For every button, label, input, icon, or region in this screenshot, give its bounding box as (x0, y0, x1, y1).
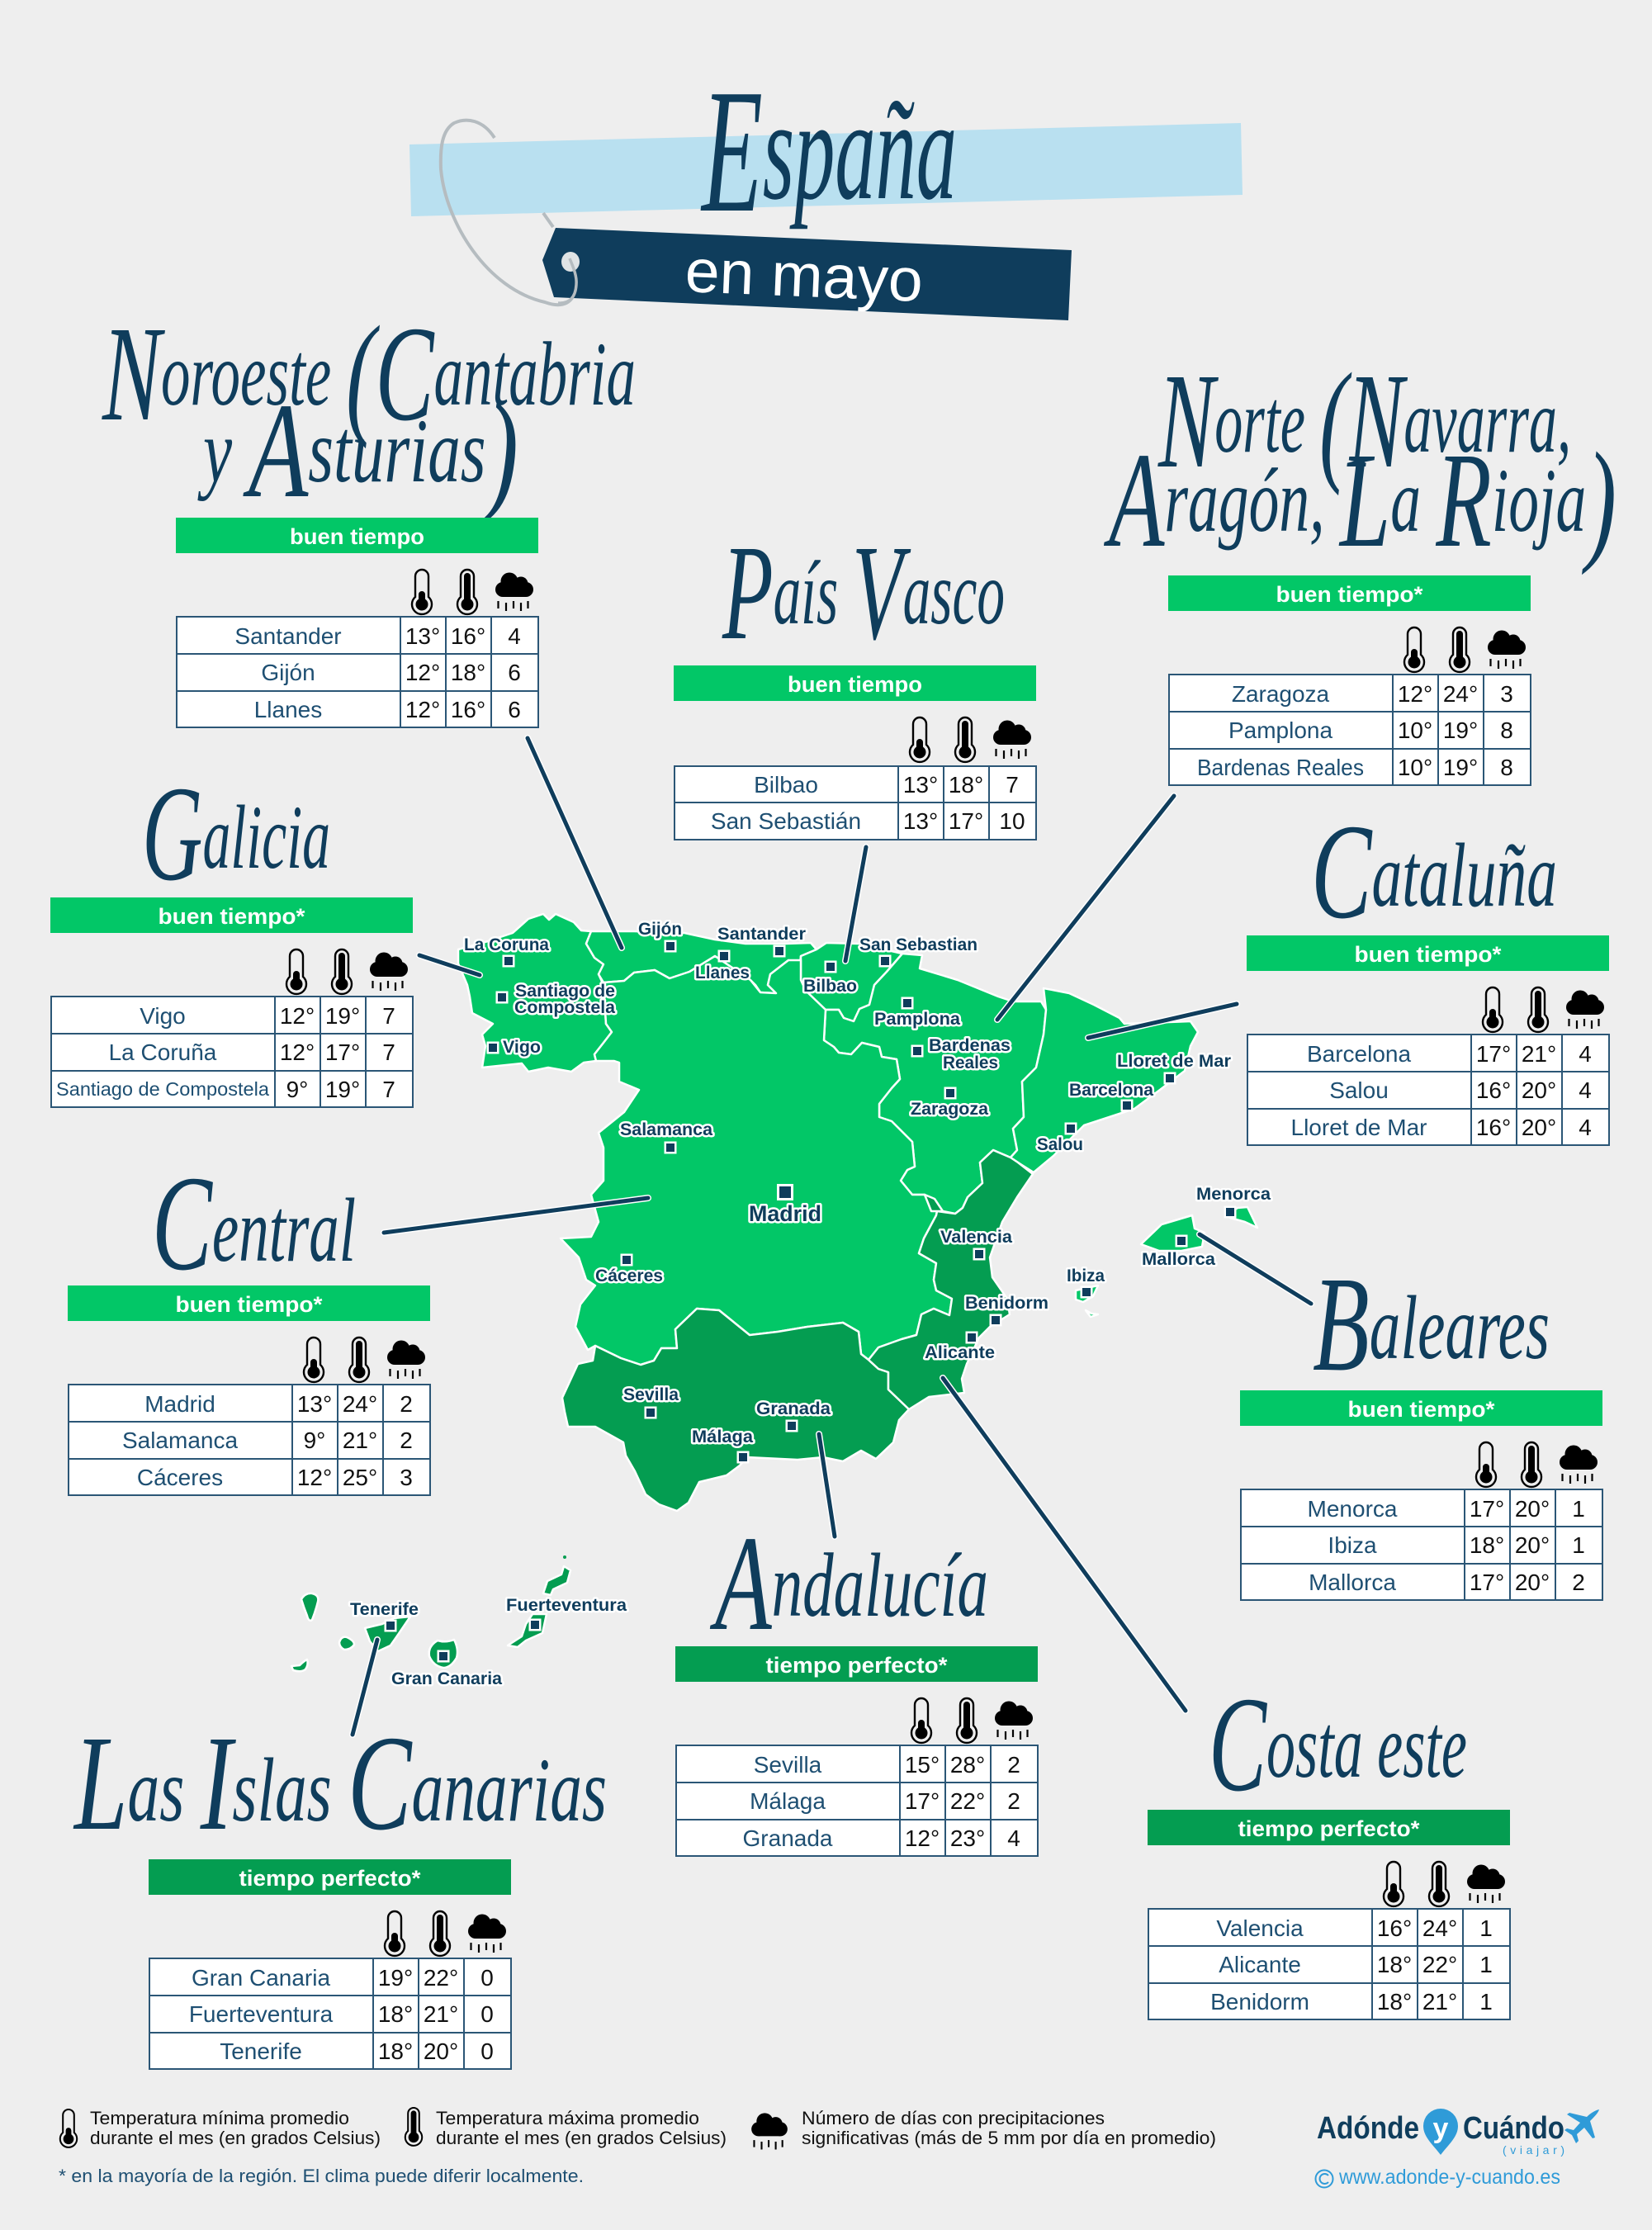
climate card: Costa este: Benidorm (1210, 1989, 1309, 2015)
climate card: Andalucía: 23° (950, 1825, 985, 1851)
climate card: País Vasco: Bilbao (754, 772, 818, 798)
climate card: Cataluña: 4 (1579, 1077, 1592, 1103)
climate card: Andalucía: 17° (905, 1788, 940, 1814)
climate card: Central: 3 (400, 1465, 413, 1490)
climate card: Central: Cáceres (137, 1465, 223, 1490)
header: title and tag (409, 52, 1243, 320)
climate card: Central: Salamanca (122, 1427, 238, 1453)
heading: Norte: ioja (1492, 450, 1586, 551)
city labels: Compostela (514, 998, 615, 1017)
city labels: Zaragoza (911, 1100, 988, 1119)
heading: Norte: ragón, (1164, 450, 1340, 551)
city labels: Bilbao (803, 977, 857, 996)
climate card: Canarias: Gran Canaria (192, 1965, 330, 1991)
climate card: Andalucía: Málaga (750, 1788, 826, 1814)
panel: Norte (1103, 345, 1616, 785)
heading: Norte: R (1436, 424, 1492, 575)
climate card: Andalucía: Granada (743, 1825, 833, 1851)
region: Andalucía (562, 1309, 909, 1511)
climate card: Noroeste: 6 (508, 660, 521, 685)
climate card: Andalucía: 15° (905, 1752, 940, 1778)
city labels: Granada (756, 1399, 831, 1418)
island: La Graciosa (563, 1555, 566, 1559)
climate card: Canarias: Fuerteventura (189, 2001, 334, 2027)
climate card: Galicia: La Coruña (109, 1039, 217, 1065)
subtitle: en mayo: en mayo (684, 236, 925, 315)
climate card: Cataluña: buen tiempo* (1354, 942, 1502, 967)
climate card: Noroeste: Santander (234, 623, 342, 649)
city labels: Reales (943, 1053, 998, 1072)
leader: Costa este (943, 1378, 1186, 1711)
heading: Las Islas Canarias: C (348, 1707, 413, 1858)
city labels: Fuerteventura (506, 1596, 627, 1615)
climate card: Andalucía: Sevilla (754, 1752, 822, 1778)
city labels (350, 920, 1271, 1688)
island: Gran Canaria (429, 1640, 457, 1668)
city labels: Benidorm (965, 1294, 1048, 1313)
climate card: Cataluña: 20° (1522, 1077, 1556, 1103)
heading: Noroeste: sturias (308, 400, 486, 501)
climate card: País Vasco: 18° (949, 772, 983, 798)
climate card: Galicia: 7 (382, 1077, 395, 1102)
region: Noroeste (586, 931, 817, 993)
climate card: Canarias: Tenerife (220, 2038, 302, 2064)
climate card: Central: 2 (400, 1391, 413, 1417)
climate card: Costa este: 18° (1377, 1989, 1412, 2015)
leader: Galicia (419, 955, 480, 975)
region: enclave (925, 1195, 943, 1211)
climate card: Canarias: 20° (424, 2038, 458, 2064)
heading: Andalucía: A (709, 1508, 773, 1659)
climate card: Noroeste: 6 (508, 697, 521, 722)
climate card: Costa este: Valencia (1216, 1915, 1304, 1941)
leader: Central (384, 1198, 648, 1233)
climate card: País Vasco: 10 (999, 808, 1025, 834)
heading: Norte: A (1103, 424, 1165, 575)
climate card: Cataluña: 16° (1476, 1077, 1511, 1103)
climate card: País Vasco: 17° (949, 808, 983, 834)
climate card: Central: 21° (343, 1427, 377, 1453)
legend text: minimum temperature: Temperatura mínima promedio (90, 2108, 349, 2128)
tag string front (558, 258, 576, 303)
city labels: Barcelona (1069, 1081, 1153, 1100)
climate card: Norte (1168, 575, 1531, 785)
climate card: Canarias: 0 (480, 2001, 494, 2027)
heading: Central: entral (212, 1180, 356, 1281)
climate card: País Vasco: 7 (1006, 772, 1019, 798)
region: Galicia (458, 914, 612, 1072)
city labels: San Sebastian (859, 935, 977, 954)
climate card: Norte: Zaragoza (1232, 681, 1330, 707)
climate card: Galicia: Vigo (140, 1003, 186, 1029)
heading: Baleares: aleares (1370, 1277, 1550, 1378)
climate card: Noroeste: 16° (451, 623, 485, 649)
climate card: Noroeste (176, 518, 538, 727)
climate card: Andalucía: 2 (1007, 1752, 1020, 1778)
island: Menorca (1230, 1207, 1257, 1228)
climate card: Central: 24° (343, 1391, 377, 1417)
climate card: Norte: 19° (1443, 755, 1478, 780)
climate card: Costa este (1148, 1810, 1510, 2019)
legend text: rain days: Número de días con precipitaciones (802, 2108, 1105, 2128)
city labels: Pamplona (874, 1010, 960, 1029)
legend text: rain days (802, 2108, 1216, 2148)
climate card: Noroeste: 4 (508, 623, 521, 649)
heading: Cataluña: C (1311, 796, 1373, 947)
climate card: Cataluña: 4 (1579, 1115, 1592, 1140)
island: Formentera (1086, 1310, 1098, 1317)
climate card: Central (68, 1285, 430, 1495)
climate card: Andalucía: 28° (950, 1752, 985, 1778)
climate card: Baleares: Menorca (1308, 1496, 1398, 1522)
heading: País Vasco: asco (903, 542, 1005, 643)
legend text: rain days: significativas (más de 5 mm por día en promedio) (802, 2128, 1216, 2148)
city labels: Bardenas (929, 1036, 1011, 1055)
climate card: Galicia: buen tiempo* (159, 904, 305, 929)
logo sub: viajar: ( v i a j a r ) (1503, 2143, 1564, 2157)
legend icon: rain cloud (751, 2113, 788, 2150)
website: www.adonde-y-cuando.es (1338, 2166, 1560, 2189)
heading: Norte: ) (1582, 424, 1616, 575)
city labels: Mallorca (1142, 1250, 1215, 1269)
climate card: Central: 25° (343, 1465, 377, 1490)
climate card: Noroeste: 12° (405, 697, 440, 722)
island: La Gomera (339, 1637, 354, 1650)
icon: copyright (1316, 2170, 1332, 2188)
heading: Las Islas Canarias: I (200, 1707, 236, 1858)
heading: Costa este: C (1209, 1669, 1267, 1820)
climate card: Canarias: tiempo perfecto* (239, 1866, 421, 1891)
light blue band (409, 123, 1243, 216)
climate card: Baleares: 18° (1470, 1532, 1504, 1558)
climate card: Baleares: 2 (1572, 1570, 1585, 1595)
legend text: minimum temperature (90, 2108, 381, 2148)
climate card: Canarias: 22° (424, 1965, 458, 1991)
city labels: Salamanca (620, 1120, 712, 1139)
heading: Noroeste: oroeste (161, 324, 346, 424)
climate card: Central: 12° (297, 1465, 332, 1490)
island: Ibiza (1076, 1285, 1098, 1302)
climate card: Noroeste: 13° (405, 623, 440, 649)
climate card: Galicia: 9° (286, 1077, 308, 1102)
climate card: Andalucía (675, 1646, 1038, 1856)
region: Costa este (869, 1150, 1033, 1409)
climate card: Norte: buen tiempo* (1276, 582, 1423, 607)
heading: Andalucía: ndalucía (772, 1535, 988, 1636)
climate card: Norte: 19° (1443, 717, 1478, 743)
heading: Norte: (N (1319, 345, 1408, 496)
island: Tenerife (365, 1617, 410, 1651)
climate card: Cataluña: Lloret de Mar (1291, 1115, 1427, 1140)
heading: Costa este: osta este (1266, 1696, 1467, 1797)
climate card: Costa este: 16° (1377, 1915, 1412, 1941)
climate card: Costa este: tiempo perfecto* (1238, 1816, 1420, 1841)
climate card: Andalucía: 12° (905, 1825, 940, 1851)
climate card: Cataluña: 17° (1476, 1041, 1511, 1067)
climate card: Andalucía: 22° (950, 1788, 985, 1814)
heading: Noroeste: N (102, 298, 165, 449)
city labels: Tenerife (350, 1600, 419, 1619)
climate card: Galicia: 12° (280, 1039, 315, 1065)
heading: Norte (1103, 345, 1616, 575)
legend (59, 2108, 1216, 2186)
climate card: Andalucía: 4 (1007, 1825, 1020, 1851)
heading: Baleares: B (1313, 1248, 1370, 1399)
island: Fuerteventura (508, 1614, 547, 1647)
heading: Las Islas Canarias: L (73, 1707, 128, 1858)
leader: Cataluña (1088, 1004, 1237, 1038)
climate card: Galicia: 7 (382, 1039, 395, 1065)
islands: Baleares (1076, 1207, 1257, 1317)
climate card: Galicia: 17° (325, 1039, 360, 1065)
heading: Noroeste: (C (346, 298, 435, 449)
panel: Las Islas Canarias (73, 1707, 607, 2069)
climate card: País Vasco: 13° (903, 772, 938, 798)
climate card: País Vasco (674, 665, 1036, 840)
heading: Las Islas Canarias: as (128, 1740, 201, 1840)
climate card: Cataluña: 16° (1476, 1115, 1511, 1140)
heading: Noroeste (102, 298, 636, 526)
city labels: Alicante (925, 1343, 995, 1362)
climate card: Norte: Pamplona (1228, 717, 1332, 743)
city labels: Gran Canaria (391, 1669, 502, 1688)
city labels: Valencia (940, 1228, 1012, 1247)
logo letter: y: y (1433, 2113, 1449, 2144)
climate card: Norte: Bardenas Reales (1197, 755, 1364, 780)
climate card: Central: 13° (297, 1391, 332, 1417)
city labels: Santiago de (515, 982, 615, 1001)
city labels: Gijón (638, 920, 682, 939)
islands: Canarias (291, 1555, 570, 1671)
climate card: Baleares: buen tiempo* (1347, 1397, 1495, 1422)
climate card: Canarias: 18° (378, 2038, 413, 2064)
region: Cataluña (1011, 988, 1198, 1172)
city labels: Ibiza (1067, 1267, 1105, 1285)
climate card: Noroeste: buen tiempo (290, 524, 424, 549)
climate card: Baleares: 17° (1470, 1496, 1504, 1522)
map of Spain (291, 738, 1311, 1735)
climate card: País Vasco: buen tiempo (788, 672, 922, 697)
heading: País Vasco: aís (774, 542, 852, 643)
climate card: Noroeste: 18° (451, 660, 485, 685)
panel: Central (68, 1148, 430, 1495)
climate card: Canarias: 21° (424, 2001, 458, 2027)
climate card: Cataluña (1247, 935, 1609, 1145)
legend text: maximum temperature (436, 2108, 727, 2148)
heading: País Vasco: P (722, 517, 774, 668)
climate card: Baleares: 1 (1572, 1532, 1585, 1558)
region: Norte (824, 954, 1046, 1214)
climate card: Costa este: Alicante (1219, 1952, 1301, 1977)
leader: Baleares (1200, 1234, 1311, 1304)
leader: Canarias (353, 1640, 377, 1735)
climate card: Norte: 3 (1500, 681, 1513, 707)
leader: Norte (997, 796, 1174, 1020)
climate card: Costa este: 21° (1422, 1989, 1457, 2015)
heading: Las Islas Canarias: anarias (412, 1740, 607, 1840)
legend text: maximum temperature: Temperatura máxima promedio (436, 2108, 699, 2128)
climate card: Noroeste: Llanes (254, 697, 322, 722)
climate card: Galicia: 12° (280, 1003, 315, 1029)
heading: Noroeste: antabria (434, 324, 636, 424)
footnote: * en la mayoría de la región. El clima puede diferir localmente. (59, 2166, 584, 2186)
heading: Noroeste: A (243, 375, 309, 526)
climate card: Costa este: 1 (1479, 1952, 1493, 1977)
climate card: Canarias: 18° (378, 2001, 413, 2027)
panel: Noroeste (102, 298, 636, 727)
climate card: Baleares: Ibiza (1328, 1532, 1377, 1558)
heading: Central: C (152, 1148, 213, 1299)
panel: Galicia (50, 758, 413, 1107)
city labels: Llanes (695, 963, 750, 982)
panel: País Vasco (674, 517, 1036, 840)
climate card: Galicia (50, 897, 413, 1107)
island: La Palma (301, 1593, 318, 1621)
city labels: Sevilla (623, 1385, 679, 1404)
climate card: Galicia: Santiago de Compostela (56, 1078, 269, 1100)
tag string (441, 121, 576, 305)
heading: Noroeste: ) (481, 375, 518, 526)
heading: Norte: orte (1214, 371, 1319, 471)
heading: Galicia: alicia (202, 787, 330, 888)
climate card: Cataluña: 20° (1522, 1115, 1556, 1140)
climate card: Costa este: 1 (1479, 1915, 1493, 1941)
icon: location pin (1423, 2109, 1458, 2155)
heading: Cataluña: ataluña (1372, 825, 1557, 926)
climate card: Andalucía: 2 (1007, 1788, 1020, 1814)
panel: Baleares (1240, 1248, 1602, 1600)
climate card: Cataluña: Barcelona (1307, 1041, 1411, 1067)
heading: Norte: N (1157, 345, 1219, 496)
climate card: Galicia: 19° (325, 1003, 360, 1029)
city labels: Lloret de Mar (1117, 1052, 1231, 1071)
island: Lanzarote (543, 1566, 570, 1595)
climate card: Noroeste: 12° (405, 660, 440, 685)
icon: plane (1564, 2109, 1599, 2143)
heading: País Vasco: V (852, 517, 911, 668)
climate card: Norte: 12° (1398, 681, 1432, 707)
climate card: Baleares: 20° (1515, 1496, 1550, 1522)
city labels: Salou (1037, 1135, 1083, 1154)
climate card: País Vasco: San Sebastián (711, 808, 861, 834)
title: España: E (700, 52, 763, 249)
climate card: Costa este: 1 (1479, 1989, 1493, 2015)
climate card: Canarias: 0 (480, 1965, 494, 1991)
city labels: Santander (717, 925, 806, 944)
climate card: Noroeste: 16° (451, 697, 485, 722)
climate card: Norte: 24° (1443, 681, 1478, 707)
climate card: Baleares: 17° (1470, 1570, 1504, 1595)
city labels: Madrid (749, 1201, 821, 1226)
climate card: País Vasco: 13° (903, 808, 938, 834)
tag hole (561, 252, 580, 272)
climate card: Cataluña: Salou (1329, 1077, 1389, 1103)
city markers (385, 940, 1237, 1663)
logo word: Cuándo: Cuándo (1463, 2111, 1564, 2146)
heading: Norte: a (1390, 450, 1436, 551)
legend text: minimum temperature: durante el mes (en grados Celsius) (90, 2128, 381, 2148)
heading: Las Islas Canarias: slas (232, 1740, 348, 1840)
city labels: La Coruna (464, 935, 549, 954)
climate card: Cataluña: 21° (1522, 1041, 1556, 1067)
legend icon: minimum temperature (60, 2109, 77, 2147)
city labels: Cáceres (595, 1267, 663, 1285)
city labels: Menorca (1196, 1185, 1271, 1204)
panel: Costa este (1148, 1669, 1510, 2019)
climate card: Norte: 8 (1500, 755, 1513, 780)
climate card: Norte: 10° (1398, 717, 1432, 743)
region: País Vasco (801, 943, 902, 1021)
climate card: Central: 2 (400, 1427, 413, 1453)
region: Central (561, 956, 952, 1365)
panel: Andalucía (675, 1508, 1038, 1856)
panel: Cataluña (1247, 796, 1609, 1145)
climate card: Central: buen tiempo* (175, 1292, 323, 1317)
city labels: Málaga (692, 1427, 753, 1446)
island: Mallorca (1141, 1215, 1205, 1251)
climate card: Galicia: 7 (382, 1003, 395, 1029)
climate card: Central: 9° (304, 1427, 325, 1453)
climate card: Norte: 8 (1500, 717, 1513, 743)
climate card: Norte: 10° (1398, 755, 1432, 780)
climate card: Central: Madrid (144, 1391, 215, 1417)
climate card: Canarias: 0 (480, 2038, 494, 2064)
legend text: maximum temperature: durante el mes (en grados Celsius) (436, 2128, 727, 2148)
climate card: Costa este: 24° (1422, 1915, 1457, 1941)
leader: Noroeste (528, 738, 622, 948)
leader lines (353, 738, 1311, 1735)
climate card: Baleares (1240, 1390, 1602, 1600)
navy tag (542, 228, 1072, 320)
leader: Andalucía (819, 1434, 835, 1536)
island: El Hierro (291, 1659, 308, 1671)
title: España: spaña (763, 69, 957, 230)
climate card: Baleares: 1 (1572, 1496, 1585, 1522)
heading: Norte: L (1339, 424, 1390, 575)
heading: Galicia: G (142, 758, 202, 909)
climate card: Noroeste: Gijón (261, 660, 315, 685)
heading: Noroeste: y (203, 400, 244, 501)
climate card: Costa este: 18° (1377, 1952, 1412, 1977)
logo: Adónde y Cuándo (1316, 2109, 1599, 2189)
climate card: Canarias: 19° (378, 1965, 413, 1991)
climate card: Cataluña: 4 (1579, 1041, 1592, 1067)
climate card: Baleares: 20° (1515, 1532, 1550, 1558)
climate card: Canarias (149, 1859, 511, 2069)
city labels: Vigo (503, 1038, 541, 1057)
logo word: Adónde: Adónde (1317, 2111, 1419, 2146)
climate card: Baleares: 20° (1515, 1570, 1550, 1595)
climate card: Costa este: 22° (1422, 1952, 1457, 1977)
climate card: Galicia: 19° (325, 1077, 360, 1102)
climate card: Andalucía: tiempo perfecto* (766, 1653, 948, 1678)
climate card: Baleares: Mallorca (1309, 1570, 1396, 1595)
legend icon: maximum temperature (405, 2108, 422, 2146)
leader: País Vasco (845, 847, 866, 961)
